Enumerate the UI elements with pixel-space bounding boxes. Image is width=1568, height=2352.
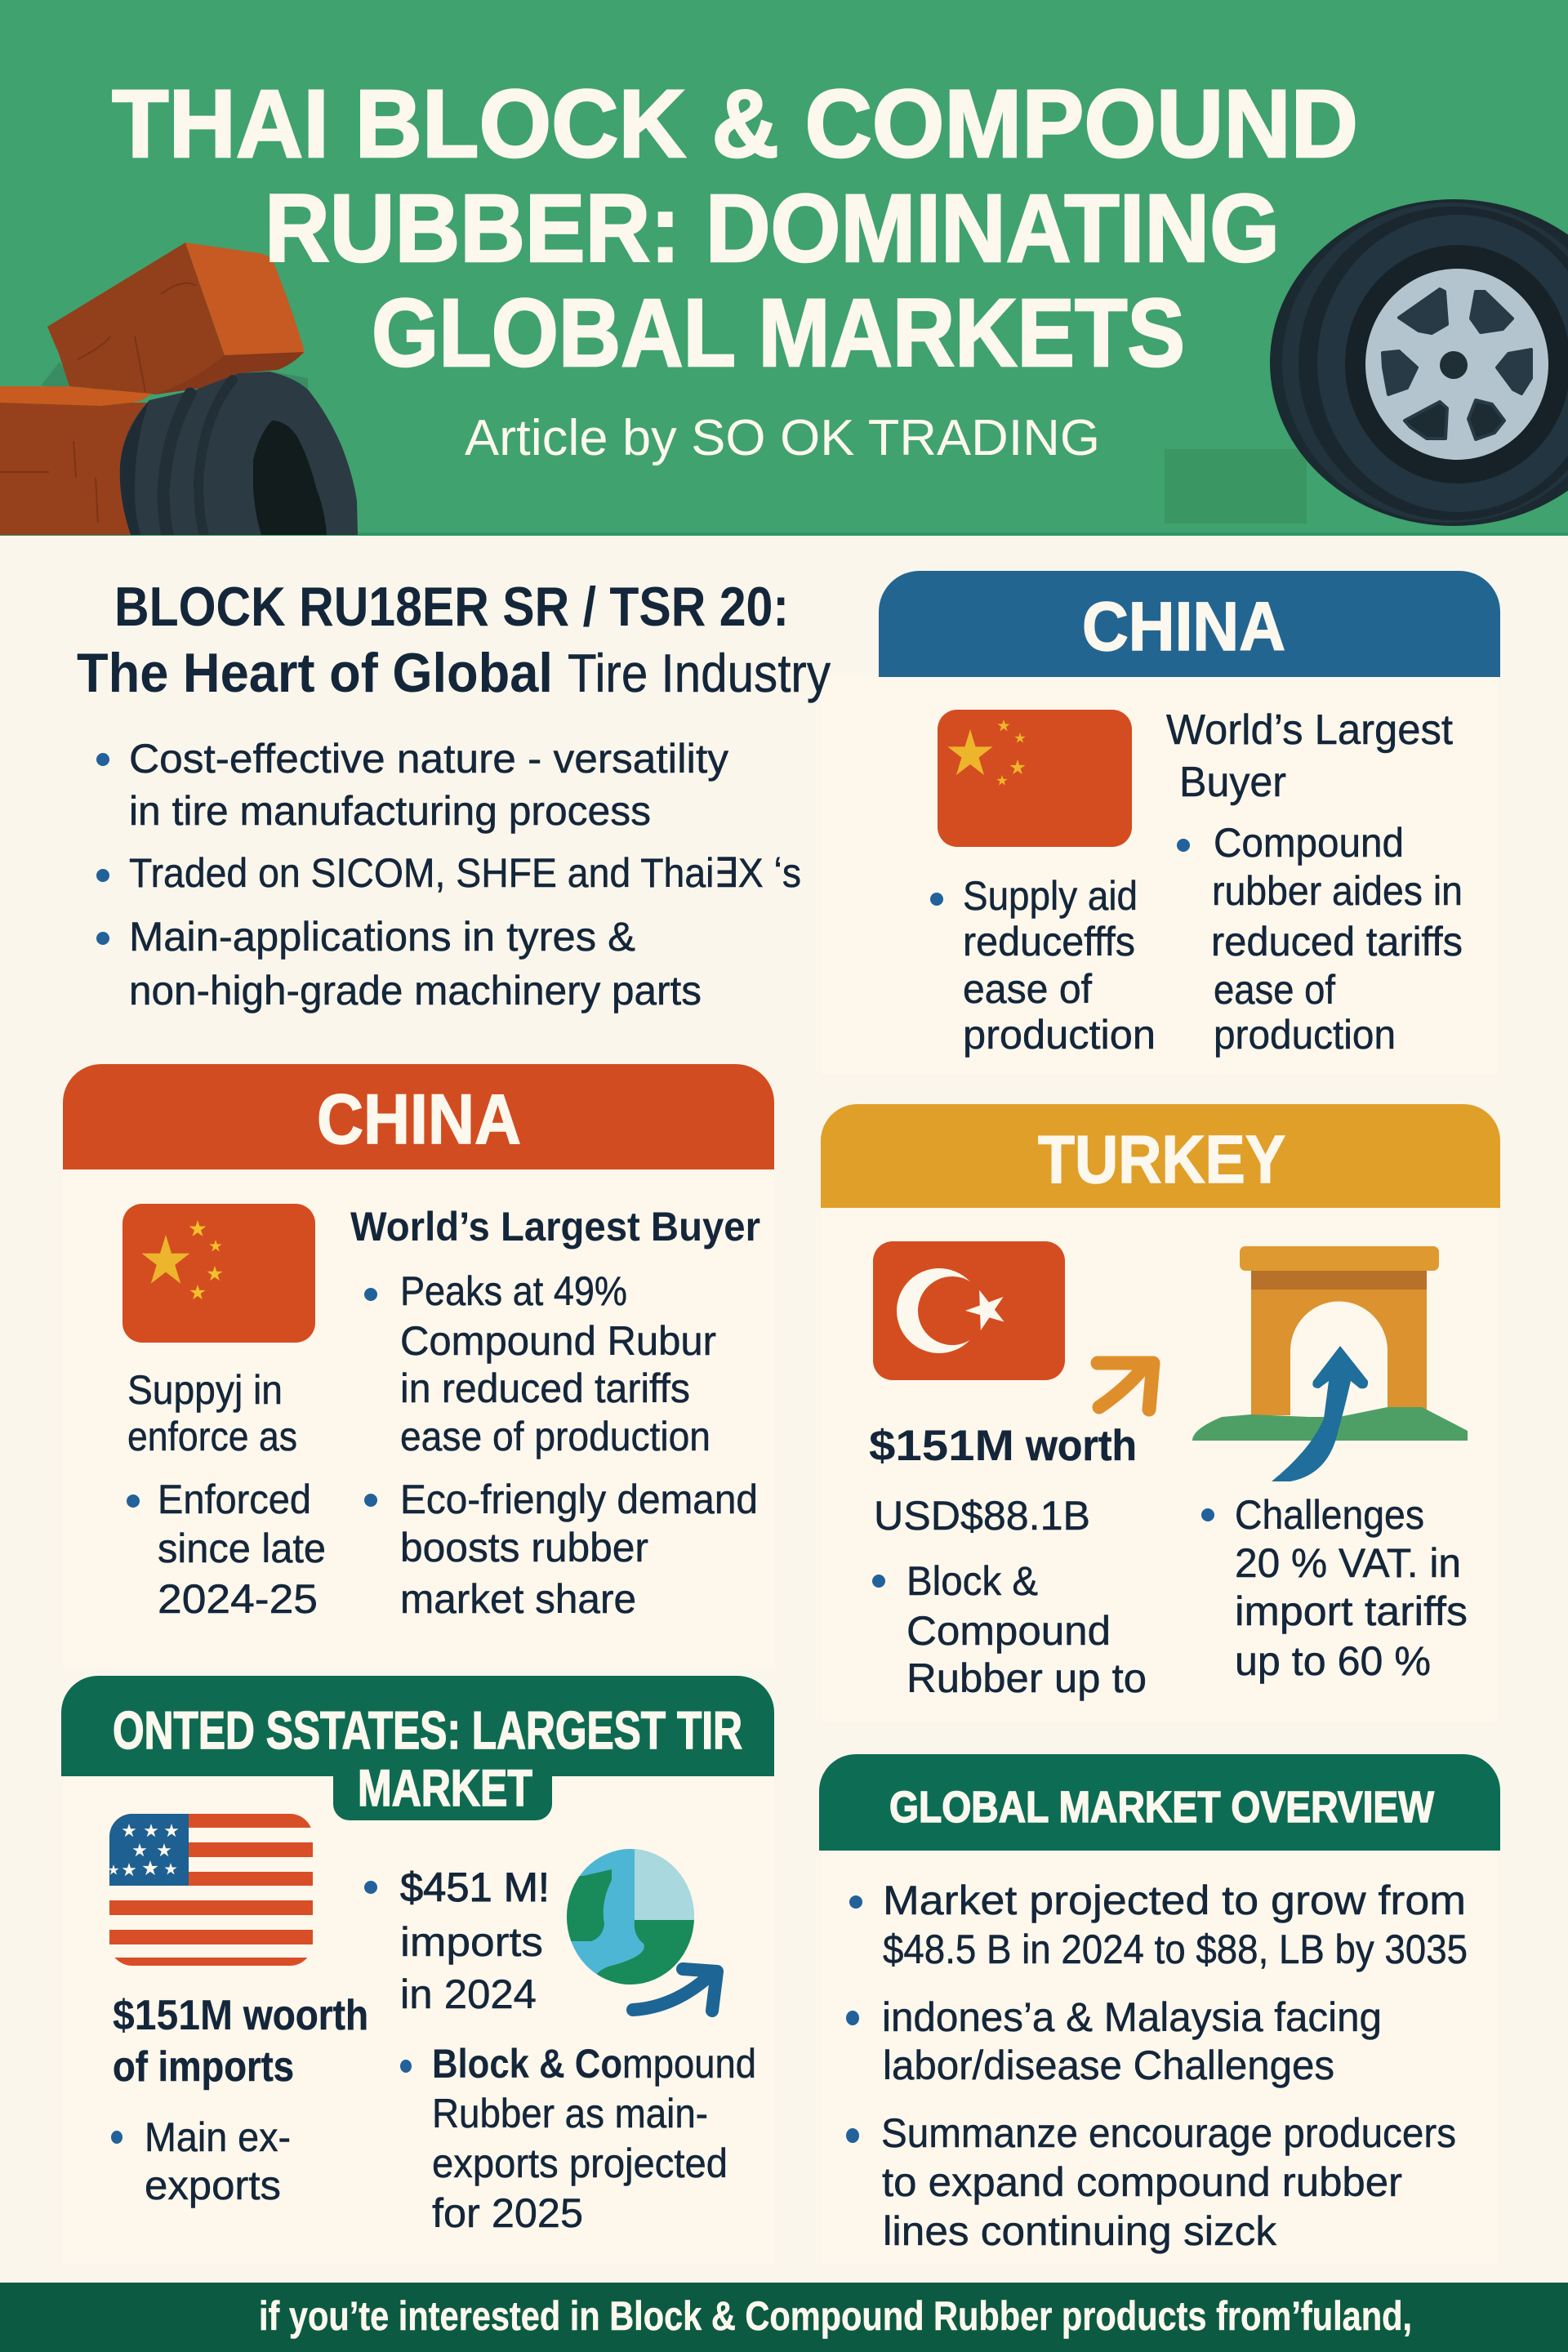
right bullet: ease of — [1214, 967, 1335, 1013]
bullet: main exports: Main ex- — [145, 2114, 291, 2160]
bullet: challenges — [1201, 1492, 1468, 1684]
bullet: imports value: $451 M! — [400, 1864, 550, 1910]
bullet: block and compound exports: Block & Co — [432, 2041, 622, 2087]
bullet: challenges: labor/disease Challenges — [883, 2042, 1334, 2088]
icon: China flag — [938, 710, 1132, 847]
icon: globe — [567, 1849, 694, 1984]
right bullet: production — [1214, 1012, 1396, 1058]
right bullet: Compound — [1214, 820, 1404, 866]
bullet list: Cost-effective nature - versatility — [129, 736, 728, 782]
stat: USD$88.1B — [874, 1493, 1090, 1539]
supply note — [127, 1367, 297, 1459]
supply note: enforce as — [127, 1414, 297, 1459]
bullet: block and compound: Compound — [906, 1608, 1111, 1654]
icon: Turkey flag — [873, 1241, 1065, 1380]
panel: global market overview — [819, 1754, 1500, 2264]
bullet: block and compound exports: exports projected — [432, 2140, 728, 2186]
bullet: block and compound exports: for 2025 — [432, 2190, 583, 2236]
icon: customs gate — [1192, 1246, 1468, 1481]
bullet list: Main-applications in tyres & — [129, 914, 635, 960]
header label: CHINA — [1082, 588, 1285, 665]
left bullet: production — [963, 1012, 1156, 1058]
stat — [113, 1992, 368, 2091]
bullet: block and compound exports — [400, 2041, 756, 2236]
header label: ONTED SSTATES: LARGEST TIR — [113, 1700, 742, 1760]
stat — [869, 1422, 1137, 1539]
subheading — [1166, 706, 1454, 806]
panel header — [821, 1104, 1500, 1208]
bullet: peaks: Peaks at 49% — [400, 1268, 627, 1314]
bullet: imports value: imports — [400, 1919, 543, 1965]
arrow: export — [1098, 1363, 1153, 1410]
left bullet: ease of — [963, 966, 1092, 1012]
title: GLOBAL MARKETS — [372, 279, 1185, 387]
panel: Turkey — [821, 1104, 1500, 1722]
bullet list: Traded on SICOM, SHFE and Thai∃X ʻs — [129, 850, 801, 896]
left bullet: reducefffs — [963, 919, 1135, 964]
bullet: enforced: Enforced — [158, 1477, 311, 1522]
bullet: block and compound: Block & — [906, 1558, 1038, 1604]
bullet: growth — [849, 1878, 1468, 1972]
bullet: challenges: import tariffs — [1235, 1588, 1468, 1634]
illustration: rubber blocks and tires — [0, 199, 1568, 535]
heading — [77, 576, 831, 704]
icon: US flag — [108, 1814, 313, 1966]
bullet: producers: Summanze encourage producers — [881, 2110, 1456, 2156]
panel header — [819, 1754, 1500, 1851]
bullet: main exports — [111, 2114, 291, 2208]
bullet: imports value — [364, 1864, 550, 2017]
bullet: block and compound exports: Rubber as main- — [432, 2091, 708, 2136]
bullet: peaks: in reduced tariffs — [400, 1365, 690, 1411]
title: RUBBER: DOMINATING — [265, 175, 1280, 283]
bullet: enforced: 2024-25 — [158, 1576, 318, 1622]
header label: TURKEY — [1038, 1121, 1285, 1197]
header label — [113, 1700, 742, 1817]
bullet list: in tire manufacturing process — [129, 788, 651, 834]
right bullet: rubber aides in — [1212, 868, 1463, 914]
left bullet — [930, 873, 1156, 1058]
right bullet: reduced tariffs — [1211, 919, 1463, 964]
bullet: eco demand — [364, 1477, 758, 1622]
heading: BLOCK RU18ER SR / TSR 20: — [114, 576, 789, 638]
subheading: Buyer — [1179, 759, 1286, 806]
bullet: eco demand: Eco-friengly demand — [400, 1477, 758, 1522]
stat: $151M — [869, 1422, 1014, 1470]
subheading: World’s Largest — [1166, 706, 1454, 754]
bullet: peaks: ease of production — [400, 1414, 710, 1459]
bullet: challenges: indones’a & Malaysia facing — [882, 1994, 1382, 2040]
bullet: peaks — [364, 1268, 716, 1459]
bullet: challenges — [846, 1994, 1382, 2088]
stat: of imports — [113, 2043, 294, 2091]
title — [112, 70, 1358, 387]
bullet: challenges: Challenges — [1235, 1492, 1424, 1538]
panel: China (red) — [63, 1064, 774, 1668]
header label: CHINA — [317, 1080, 521, 1159]
panel header — [879, 571, 1500, 677]
bullet list — [96, 736, 801, 1013]
footer banner — [0, 2283, 1568, 2352]
heading: The Heart of Global — [77, 642, 553, 704]
panel header — [61, 1676, 774, 1820]
panel: United States — [61, 1676, 774, 2265]
bullet: imports value: in 2024 — [400, 1971, 537, 2017]
bullet: eco demand: boosts rubber — [400, 1525, 648, 1570]
bullet: block and compound — [872, 1558, 1147, 1701]
supply note: Suppyj in — [127, 1367, 283, 1413]
arrow: globe — [633, 1969, 717, 2011]
stat: worth — [1025, 1422, 1137, 1470]
stat: woorth — [243, 1992, 368, 2039]
bullet: enforced — [127, 1477, 326, 1622]
bullet: main exports: exports — [145, 2163, 281, 2208]
bullet: challenges: up to 60 % — [1235, 1638, 1431, 1684]
panel header — [63, 1064, 774, 1169]
icon: China flag — [122, 1204, 315, 1343]
subtitle: Article by SO OK TRADING — [465, 410, 1100, 466]
bullet: producers: lines continuing sizck — [883, 2208, 1277, 2254]
bullet list: non-high-grade machinery parts — [129, 968, 702, 1013]
title: THAI BLOCK & COMPOUND — [112, 70, 1358, 178]
panel: block rubber intro — [77, 576, 831, 1013]
bullet: growth: $48.5 B in 2024 to $88, LB by 3035 — [883, 1927, 1468, 1972]
bullet: challenges: 20 % VAT. in — [1235, 1540, 1461, 1586]
right bullet — [1177, 820, 1463, 1058]
left bullet: Supply aid — [963, 873, 1138, 919]
header label: GLOBAL MARKET OVERVIEW — [889, 1783, 1434, 1832]
bullet: growth: Market projected to grow from — [883, 1878, 1466, 1923]
arrow: import — [1272, 1346, 1368, 1481]
bullet: producers: to expand compound rubber — [882, 2159, 1402, 2205]
bullet: block and compound exports: mpound — [622, 2041, 756, 2087]
bullet: peaks: Compound Rubur — [400, 1318, 716, 1364]
bullet: producers — [846, 2110, 1456, 2254]
bullet: eco demand: market share — [400, 1576, 636, 1622]
panel: China (blue) — [821, 571, 1500, 1075]
bullet: block and compound: Rubber up to — [906, 1655, 1147, 1701]
header label: MARKET — [358, 1760, 532, 1817]
subheading: World’s Largest Buyer — [350, 1204, 760, 1250]
heading: Tire Industry — [568, 643, 831, 703]
stat: $151M — [113, 1992, 233, 2039]
header banner — [0, 0, 1568, 536]
bullet: enforced: since late — [158, 1526, 326, 1571]
